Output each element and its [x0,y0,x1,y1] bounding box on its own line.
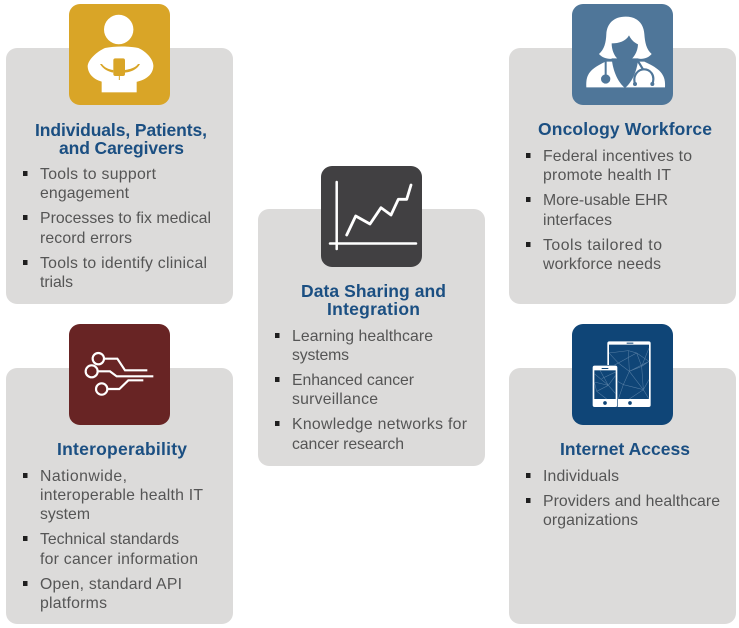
heading: internet access: Internet Access [560,439,690,459]
heading: oncology workforce: Oncology Workforce [538,119,712,139]
bullet list: workforce: interfaces [543,212,612,229]
panel: individuals, patients, caregivers [6,4,233,304]
heading: individuals, patients, and caregivers: Individuals, Patients, [35,120,207,140]
icon: tablet and phone [572,324,673,425]
panel: data sharing and integration [258,166,485,466]
bullet list: interoperability: for cancer information [40,551,198,568]
bullet list: individuals: engagement [40,185,130,202]
bullet list: data sharing: cancer research [292,436,404,453]
bullet list: interoperability: platforms [40,595,107,612]
bullet list: workforce: workforce needs [542,256,661,273]
bullet list: individuals: Tools to identify clinical [40,255,207,272]
bullet list: individuals: Processes to fix medical [40,210,211,227]
bullet list: individuals: Tools to support [40,166,157,183]
bullet list: interoperability: Technical standards [40,531,179,548]
bullet list: interoperability: interoperable health IT [40,487,203,504]
bullet list: internet access: Providers and healthcare [543,493,720,510]
bullet list: workforce: Federal incentives to [543,148,692,165]
bullet list: data sharing: surveillance [292,391,378,408]
bullet list: interoperability: Nationwide, [40,468,127,485]
icon: doctor with stethoscope [572,4,673,105]
bullet list: interoperability: system [40,506,90,523]
bullet list: internet access: organizations [543,512,638,529]
panel: interoperability [6,324,233,624]
bullet list: data sharing: Knowledge networks for [292,416,467,433]
heading: individuals, patients, and caregivers: and Caregivers [59,138,184,158]
bullet list: individuals [23,166,211,291]
bullet list: workforce: Tools tailored to [543,237,662,254]
bullet list: workforce [526,148,692,273]
heading: individuals, patients, and caregivers [35,120,207,158]
bullet list: data sharing: systems [292,347,349,364]
heading: data sharing and integration: Data Sharing and [301,281,446,301]
bullet list: data sharing [275,328,467,453]
icon: person with phone [69,4,170,105]
bullet list: interoperability: Open, standard API [40,576,182,593]
bullet list: internet access: Individuals [543,468,619,485]
bullet list: workforce: More-usable EHR [543,192,668,209]
bullet list: individuals: record errors [40,230,132,247]
panel: oncology workforce [509,4,736,304]
bullet list: data sharing: Enhanced cancer [292,372,414,389]
heading: interoperability: Interoperability [57,439,187,459]
bullet list: workforce: promote health IT [543,167,671,184]
panel: internet access [509,324,736,624]
bullet list: interoperability [23,468,203,612]
icon: circuit connections [69,324,170,425]
icon: line chart [321,166,422,267]
heading: data sharing and integration: Integration [327,299,420,319]
bullet list: individuals: trials [40,274,73,291]
bullet list: data sharing: Learning healthcare [292,328,433,345]
heading: data sharing and integration [301,281,446,319]
bullet list: internet access [526,468,720,529]
